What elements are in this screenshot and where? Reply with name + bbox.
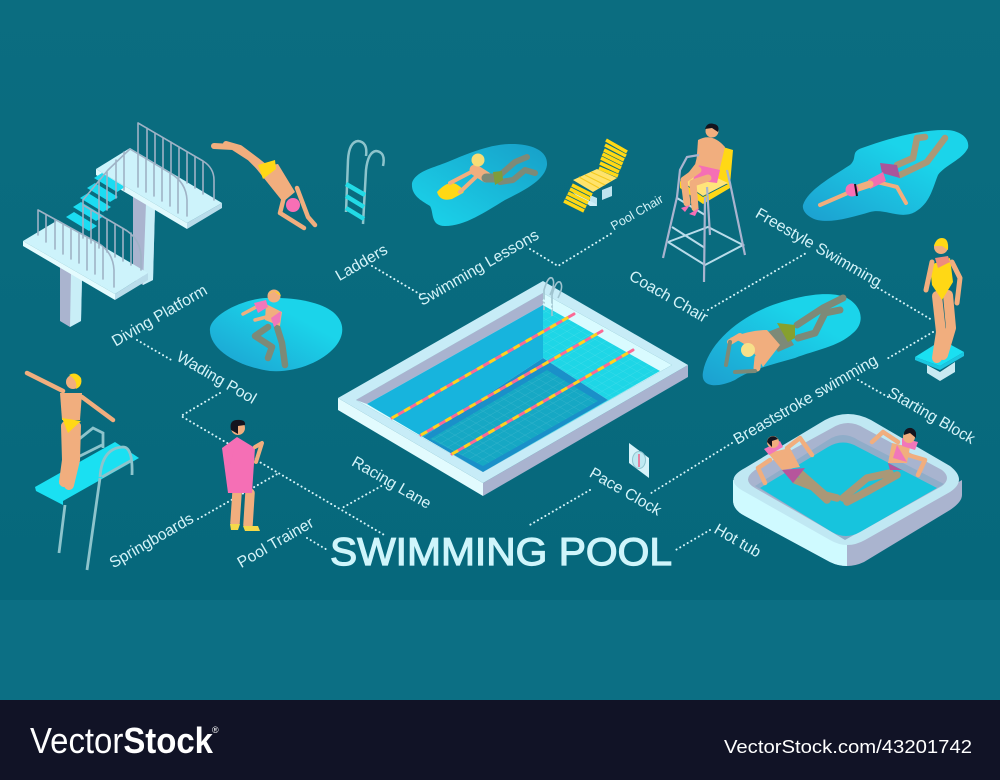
icon: ladders <box>346 141 384 224</box>
label: Coach Chair: Coach Chair <box>626 268 711 326</box>
footer bar: ® <box>212 725 219 735</box>
icon: pace clock <box>629 443 649 478</box>
title: SWIMMING POOL <box>330 531 672 574</box>
icon: swimming lesson blob <box>412 144 547 226</box>
footer bar: VectorStock <box>30 720 214 761</box>
icon: pool trainer <box>222 420 262 531</box>
icon: coach chair <box>663 124 745 282</box>
label: Freestyle Swimming: Freestyle Swimming <box>752 205 884 291</box>
footer bar <box>0 700 1000 780</box>
label: Pool Chair: Pool Chair <box>608 192 666 233</box>
icon: pool chair <box>564 140 627 211</box>
icon: freestyle blob <box>803 130 968 221</box>
icon: breaststroke blob <box>703 294 861 385</box>
footer bar: VectorStock.com/43201742 <box>724 737 972 757</box>
label: Starting Block: Starting Block <box>885 384 978 448</box>
icon: hot tub <box>733 414 962 566</box>
label: Breaststroke swimming: Breaststroke swimming <box>731 352 881 448</box>
background <box>0 0 1000 600</box>
icon: racing pool <box>338 278 688 496</box>
dotted connector lines <box>137 233 933 551</box>
label: Ladders: Ladders <box>333 241 391 285</box>
icon: diver <box>214 144 315 228</box>
icon: wading pool blob <box>210 290 342 371</box>
label: Racing Lane: Racing Lane <box>349 454 434 513</box>
label: Springboards: Springboards <box>107 510 197 572</box>
icon: springboard with swimmer <box>27 373 139 570</box>
label: Swimming Lessons: Swimming Lessons <box>416 227 542 309</box>
label: Wading Pool: Wading Pool <box>173 348 259 408</box>
label: Pace Clock: Pace Clock <box>586 465 664 519</box>
icon: starting block with swimmer <box>915 238 964 381</box>
icon: diving platform <box>23 123 222 327</box>
label: Hot tub: Hot tub <box>711 521 764 561</box>
label: Pool Trainer: Pool Trainer <box>235 514 317 572</box>
label: Diving Platform: Diving Platform <box>109 282 210 350</box>
